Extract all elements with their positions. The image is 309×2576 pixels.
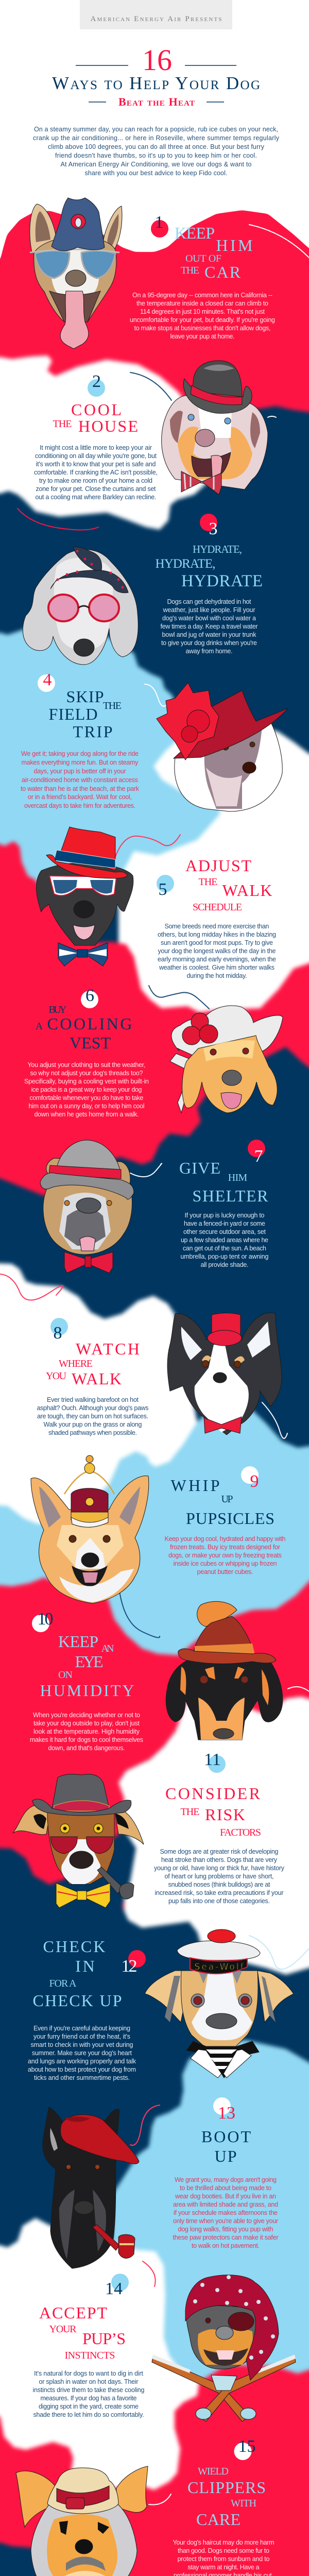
panel: tip 9 [31,1455,286,1603]
heading: whip up pupsicles [171,1476,274,1528]
tip number 9: 9 [250,1472,259,1491]
tip number 3 [200,514,217,538]
heading: keep an eye on humidity: KEEP [58,1632,98,1651]
heading: buy a cooling vest: COOLING [47,1014,132,1033]
body text: young or old, have long or thick fur, have history [154,1865,285,1872]
heading: keep an eye on humidity [40,1632,134,1700]
dog 8 papillon with red top hat [167,1313,282,1435]
body text: We get it; taking your dog along for the ride [21,750,139,757]
heading: keep him out of the car [175,224,252,281]
heading: whip up pupsicles: WHIP [171,1476,219,1495]
body text: to give your dog drinks when you're [161,639,257,647]
body text: bowl and jug of water in your trunk [162,631,256,638]
body text: days, your pup is better off in your [34,768,126,775]
body text: away from home. [185,648,233,655]
dog 5 with red fedora and flag sunglasses [37,827,133,966]
tip number 2 [88,372,105,397]
body text: shade there to let him do so comfortably. [33,2411,144,2418]
dog 7 bulldog with grey bowler and red bow [40,1140,134,1273]
body text: look at the temperature. High humidity [33,1728,140,1735]
dog 14 rottweiler pirate with crossed pistols [152,2275,296,2421]
heading: boot up: BOOT [201,2127,251,2146]
heading: keep an eye on humidity: AN [101,1643,114,1654]
body text: digging spot in the yard, create some [39,2403,139,2410]
intro paragraph: friend doesn't have thumbs, so it's up to you to keep him or her cool. [55,152,257,159]
body text: if your schedule makes afternoons the [174,2209,278,2216]
body text: air-conditioned home with constant access [22,776,138,784]
body text: area with limited shade and grass, and [173,2201,278,2208]
body text: 114 degrees in just 10 minutes. That's not just [140,308,265,315]
heading: buy a cooling vest [36,1004,132,1052]
heading: watch where you walk: WHERE [59,1358,93,1369]
heading: keep him out of the car: THE [181,265,199,276]
body text: instincts drive them to take these cooling [33,2386,145,2394]
body text: your furry friend out of the heat, it's [33,2033,130,2040]
tip number 11: 11 [204,1750,221,1769]
body text: other secure outdoor area, set [183,1228,266,1235]
tip number 5 [157,875,174,899]
panel: tip 7 [40,1140,269,1273]
tip number 10 [32,1609,54,1632]
tip number 12 [122,1950,146,1976]
body text: the temperature inside a closed car can climb to [136,300,268,307]
tip number 11 [204,1750,226,1773]
heading: accept your pup's instincts: PUP’S [82,2329,126,2348]
body text: weather is coolest. Give him shorter walks [159,964,274,971]
dog 2 with bowler hat [162,361,268,495]
body text: stay warm at night. Have a [187,2564,260,2571]
body text: Some breeds need more exercise than [165,923,269,930]
body text: and lungs are working properly and talk [28,2058,136,2065]
intro paragraph: On a steamy summer day, you can reach for a popsicle, rub ice cubes on your neck, [34,126,278,133]
heading: consider the risk factors: FACTORS [220,1827,261,1838]
heading: accept your pup's instincts: YOUR [49,2324,77,2335]
tip number 9 [241,1466,259,1491]
body text: down, and that's dangerous. [48,1744,125,1752]
heading: give him shelter: GIVE [179,1159,220,1177]
body text: take your dog outside to play, don't just [33,1720,140,1727]
tip number 4 [38,670,55,692]
dog 1 with garrison cap [30,198,122,349]
dog 3 with polka-dot bandana and pink glasses [23,547,138,665]
body text: out a cooling mat where Barkley can recline. [35,494,157,501]
heading: check in for a check up [33,1937,122,2010]
body text: Some dogs are at greater risk of developing [160,1848,279,1855]
body text [180,1212,269,1268]
heading: adjust the walk schedule: THE [199,876,217,888]
intro paragraph: crank up the air conditioning... or here in Roseville, where summer temps regularly [33,134,280,142]
body text: snubbed noses (think bulldogs) are at [168,1881,270,1888]
body text: or splash in water on hot days. Their [39,2378,138,2385]
intro paragraph: At American Energy Air Conditioning, we love our dogs & want to [61,161,252,168]
dog 15 yorkie with straw hat [16,2466,148,2576]
body text [33,2370,145,2418]
body text: pup falls into one of those categories. [168,1897,270,1905]
body text: dog long walks, fitting you pup with [178,2226,273,2233]
heading: wield clippers with care [187,2466,266,2529]
heading: give him shelter: HIM [228,1172,247,1183]
body text: to make stops at businesses that don't allow dogs, [134,325,271,332]
dog 11 with cowboy hat, red glasses and pipe [13,1774,144,1908]
body text: measures. If your dog has a favorite [40,2395,137,2402]
body text: It might cost a little more to keep your air [40,444,152,451]
body text: up a few shaded areas where he [181,1236,268,1244]
heading: wield clippers with care: CARE [196,2510,241,2529]
heading: keep him out of the car: CAR [204,263,241,281]
panel: tip 2 [34,361,268,501]
body text: all provide shade. [201,1261,248,1268]
body text: smart to check in with your vet during [31,2041,133,2048]
tip number 3: 3 [209,519,217,538]
heading: watch where you walk [46,1340,140,1388]
heading: buy a cooling vest: A [36,1021,43,1032]
body text: Keep your dog cool, hydrated and happy with [165,1535,286,1543]
panel: tip 13 [43,2097,278,2268]
heading: hydrate hydrate hydrate: HYDRATE [181,572,263,590]
body text: If your pup is lucky enough to [184,1212,265,1219]
body text: it's worth it to know that your pet is safe and [36,461,156,468]
heading: watch where you walk: WALK [72,1369,122,1388]
heading: check in for a check up: FOR A [49,1978,77,1989]
heading: consider the risk factors: RISK [205,1805,245,1824]
heading: adjust the walk schedule: WALK [222,881,272,900]
heading: cool the house: HOUSE [78,417,138,435]
body text: others, but long midday hikes in the blazing [158,931,276,938]
tip number 15: 15 [238,2437,255,2456]
body text: conditioning on all day while you're gone, but [35,452,157,460]
heading: check in for a check up: CHECK [43,1937,105,1956]
heading: wield clippers with care: CLIPPERS [187,2478,266,2497]
body text: Walk your pup on the grass or along [43,1421,142,1428]
title: Beat the Heat [118,95,195,108]
heading: skip the field trip: THE [103,700,122,711]
body text: increased risk, so take extra precautions if your [154,1889,283,1896]
heading: keep him out of the car: OUT OF [185,253,221,264]
tip number 8: 8 [54,1324,62,1343]
panel: tip 5 [37,827,276,979]
body text [173,2539,274,2576]
tip number 1 [151,213,168,238]
body text [24,1061,149,1118]
body text: Your dog's haircut may do more harm [173,2539,274,2546]
heading: adjust the walk schedule: SCHEDULE [193,902,242,913]
heading: accept your pup's instincts [39,2303,126,2361]
body text: When you're deciding whether or not to [33,1711,140,1719]
panel: tip 3 [23,514,263,665]
tip number 14 [105,2274,129,2298]
body text: only time when you're able to give your [173,2217,278,2225]
panel: tip 1 [30,198,275,349]
body text: Even if you're careful about keeping [33,2025,130,2032]
tip number 7: 7 [254,1147,263,1166]
body text [130,292,275,340]
tip number 7 [248,1140,265,1166]
heading: buy a cooling vest: BUY [48,1004,67,1015]
body text: frozen treats. Buy icy treats designed for [170,1544,280,1551]
body text: him out on a sunny day, or to help him cool [29,1103,144,1110]
body text: makes it hard for dogs to cool themselves [30,1736,143,1743]
body text: these paw protectors can make it safer [173,2234,278,2241]
panel: tip 8 [37,1313,282,1436]
panel: tip 12 [28,1929,294,2081]
panel: tip 15 [16,2437,274,2576]
body text: few times a day. Keep a travel water [161,623,258,630]
intro paragraph [33,126,280,177]
heading: keep him out of the car: KEEP [175,224,215,242]
header tag [80,0,232,29]
heading: accept your pup's instincts: ACCEPT [39,2303,107,2322]
body text: so why not adjust your dog's threads too? [30,1070,143,1077]
body text: peanut butter cubes. [197,1568,253,1575]
body text: your dog the longest walks of the day in the [158,947,276,955]
body text: can get out of the sun. A beach [183,1245,266,1252]
body text: protect them from sunburn and to [177,2555,270,2563]
body text: comfortable. If cranking the AC isn't possible, [34,469,158,476]
body text: comfortable whenever you do have to take [30,1094,144,1101]
body text [158,923,276,979]
body text: to water than he is at the beach, at the park [21,785,140,792]
heading: buy a cooling vest: VEST [70,1033,111,1052]
body text: heat stroke than others. Dogs that are very [161,1856,278,1863]
heading: consider the risk factors: CONSIDER [165,1784,261,1803]
intro paragraph: share with you our best advice to keep Fido cool. [84,170,228,177]
heading: skip the field trip: FIELD [48,705,98,723]
body text: sun aren't good for most pups. Try to give [161,939,273,946]
tip number 1: 1 [154,213,164,232]
tip number 13 [213,2097,235,2123]
body text: zone for your pet. Close the curtains and set [36,485,156,493]
tip number 15 [234,2437,255,2460]
body text [173,2176,278,2249]
heading: cool the house [53,400,138,435]
heading: watch where you walk: YOU [46,1370,67,1382]
body text: shaded pathways when possible. [48,1429,137,1436]
body text: summer. Make sure your dog's heart [32,2049,132,2057]
heading: keep him out of the car: HIM [216,236,252,255]
heading: boot up [201,2127,251,2165]
body text: down when he gets home from a walk. [34,1111,139,1118]
tip number 5: 5 [159,880,167,899]
heading: whip up pupsicles: UP [221,1494,233,1505]
dog 12 with sailor hat and striped shirt: Sea-Wolf [195,1962,244,1972]
title: 16 [142,43,172,77]
tip number 6: 6 [85,986,94,1005]
body text: or in a friend's backyard. Wait for cool, [28,793,132,801]
dog 6 with white rose hat [170,1006,283,1113]
body text: try to make one room of your home a cold [39,477,152,484]
heading: watch where you walk: WATCH [76,1340,140,1358]
body text: during the hot midday. [186,972,247,979]
body text: We grant you, many dogs aren't going [175,2176,277,2183]
heading: skip the field trip [48,687,122,741]
panel: tip 6 [24,986,283,1118]
panel: tip 11 [13,1750,285,1908]
body text: You adjust your clothing to suit the weather, [28,1061,145,1069]
heading: hydrate hydrate hydrate [156,543,263,590]
panel: tip 4 [21,670,288,811]
body text: ticks and other summertime pests. [34,2074,130,2081]
body text: makes everything more fun. But on steamy [22,759,139,766]
body text: uncomfortable for your pet, but deadly. If you're going [130,316,275,324]
heading: whip up pupsicles: PUPSICLES [186,1509,274,1528]
heading: cool the house: COOL [71,400,122,419]
dog 13 scottie with plaid beret and pipe [43,2107,139,2268]
body text: Specifically, buying a cooling vest with built-in [24,1078,149,1085]
heading: wield clippers with care: WITH [231,2498,256,2509]
heading: keep an eye on humidity: HUMIDITY [40,1681,134,1700]
body text: overcast days to take him for adventures. [24,802,135,809]
body text [37,1396,148,1436]
body text: have a fenced-in yard or some [184,1220,265,1227]
title: Ways to Help Your Dog [52,73,260,93]
heading: hydrate hydrate hydrate: HYDRATE, [156,557,215,571]
body text: weather, just like people. Fill your [163,606,255,614]
body text: to be thrilled about being made to [180,2184,271,2192]
body text [21,750,140,809]
body text: It's natural for dogs to want to dig in dirt [34,2370,144,2377]
panel: tip 14 [33,2274,296,2421]
title [52,43,260,108]
heading: skip the field trip: TRIP [73,722,112,741]
heading: hydrate hydrate hydrate: HYDRATE, [193,543,242,555]
heading: cool the house: THE [53,418,72,430]
intro paragraph: climb above 100 degrees, you can do all three at once. But your best furry [48,143,265,150]
body text: leave your pup at home. [170,333,235,340]
body text: ice packs is a great way to keep your dog [31,1086,142,1093]
heading: adjust the walk schedule: ADJUST [185,856,251,875]
heading: check in for a check up: IN [75,1957,95,1975]
body text: early morning and early evenings, when the [158,956,276,963]
heading: consider the risk factors [165,1784,261,1838]
heading: give him shelter [179,1159,268,1205]
tip number 14: 14 [105,2279,123,2298]
body text [28,2025,136,2081]
dog 9 corgi with crown [31,1455,149,1603]
tip number 4: 4 [43,670,52,689]
body text [154,1848,285,1905]
tip number 6 [81,986,98,1008]
tip number 2: 2 [92,372,101,391]
tip number 10: 10 [37,1609,54,1629]
heading: skip the field trip: SKIP [66,687,104,706]
body text: about how to best protect your dog from [28,2066,136,2073]
body text: asphalt? Ouch. Although your dog's paws [37,1404,148,1412]
heading: consider the risk factors: THE [180,1806,200,1818]
tip number 8 [50,1318,68,1343]
heading: give him shelter: SHELTER [193,1187,268,1205]
body text: Ever tried walking barefoot on hot [47,1396,139,1403]
body text [30,1711,143,1752]
body text: On a 95-degree day -- common here in California -- [132,292,272,299]
heading: check in for a check up: CHECK UP [33,1991,122,2010]
dog 10 dachshund with brown feather hat [166,1601,283,1740]
body text [165,1535,286,1575]
dog 4 with red flower hat [157,683,288,811]
body text [34,444,158,501]
dog 12 with sailor hat and striped shirt [145,1929,294,2078]
tip number 13: 13 [218,2104,235,2123]
body text: umbrella, pop-up tent or awning [180,1253,269,1260]
body text: inside ice cubes or whipping up frozen [173,1560,277,1567]
header tag: American Energy Air Presents [91,15,221,23]
tip number 12: 12 [122,1957,137,1976]
heading: accept your pup's instincts: INSTINCTS [65,2350,115,2361]
heading: keep an eye on humidity: ON [58,1669,73,1681]
body text: Dogs can get dehydrated in hot [167,598,251,605]
body text: dogs, or make your own by freezing treats [168,1552,282,1559]
body text: dog's water bowl with cool water a [162,615,256,622]
body text: wear dog booties. But if you live in an [175,2193,276,2200]
body text [161,598,258,655]
body text: than good. Dogs need some fur to [178,2547,269,2554]
heading: keep an eye on humidity: EYE [75,1652,103,1671]
panel: tip 10 [30,1601,283,1752]
heading: boot up: UP [214,2147,237,2165]
heading: wield clippers with care: WIELD [198,2466,229,2477]
body text: of heart or lung problems or have short, [165,1873,274,1880]
body text: are tough, they can burn on hot surfaces. [37,1413,148,1420]
heading: adjust the walk schedule [185,856,272,913]
body text: to walk on hot pavement. [192,2242,260,2249]
